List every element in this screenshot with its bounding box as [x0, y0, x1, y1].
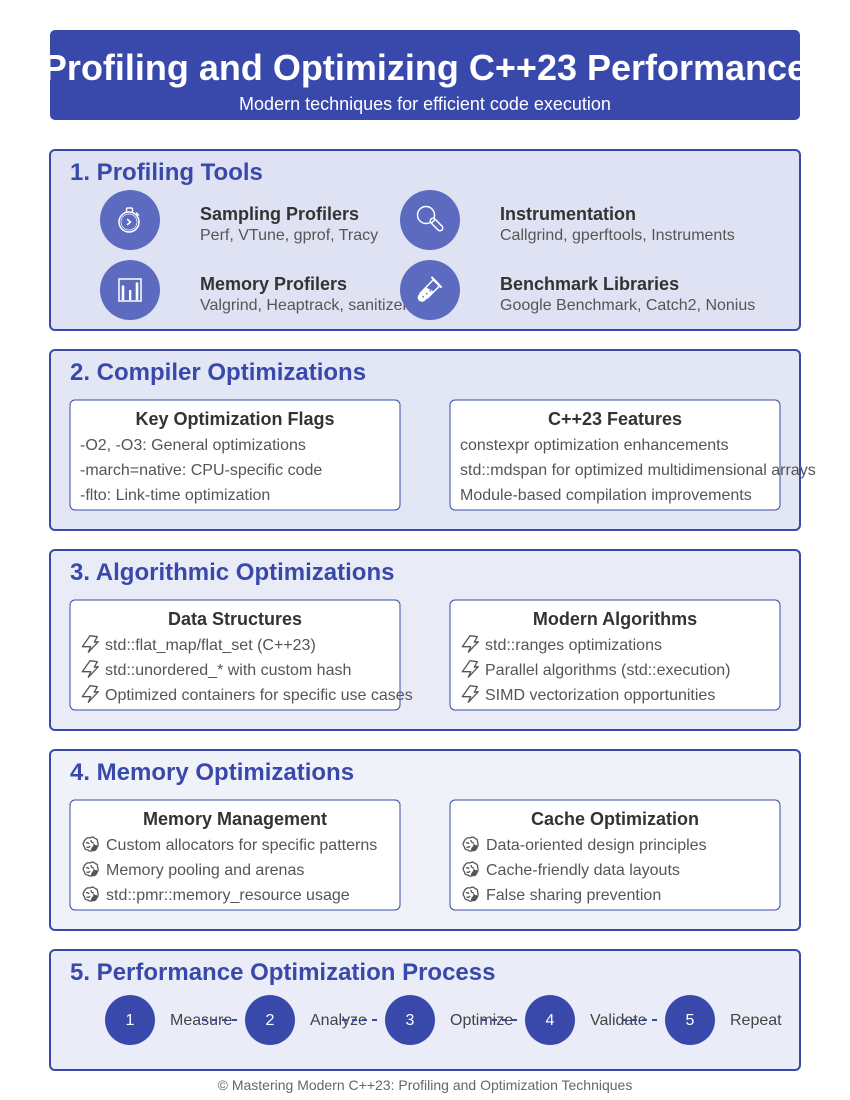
card: key optimization flags: Key Optimization Flags [135, 409, 335, 429]
step 2: 2 [266, 1012, 275, 1029]
tool: instrumentation [400, 190, 735, 250]
step 3: Optimize [450, 1012, 513, 1029]
card: modern algorithms: SIMD vectorization opportunities [485, 687, 715, 704]
icon: stopwatch [119, 208, 139, 232]
title: Profiling and Optimizing C++23 Performance [43, 47, 807, 88]
card: cache optimization: False sharing prevention [486, 887, 661, 904]
heading: process: 5. Performance Optimization Process [70, 959, 495, 986]
step 4: Validate [590, 1012, 647, 1029]
panel: algorithmic optimizations [50, 550, 800, 730]
tool: benchmark libraries [400, 260, 755, 320]
card: modern algorithms: Modern Algorithms [533, 609, 697, 629]
tool: sampling profilers [100, 190, 378, 250]
icon: magnifier [418, 206, 440, 228]
tool: memory profilers: Memory Profilers [200, 274, 347, 294]
card: modern algorithms: Parallel algorithms (std::execution) [485, 662, 730, 679]
heading: memory optimizations: 4. Memory Optimizations [70, 759, 354, 786]
card: memory management: Memory Management [143, 809, 327, 829]
card: data structures: std::unordered_* with custom hash [105, 662, 351, 679]
card: data structures: Data Structures [168, 609, 302, 629]
tool: memory profilers [100, 260, 416, 320]
card: key optimization flags [70, 400, 400, 510]
step 2: Analyze [310, 1012, 367, 1029]
tool: memory profilers: Valgrind, Heaptrack, sanitizers [200, 297, 416, 314]
panel: performance optimization process [50, 950, 800, 1070]
panel: memory optimizations [50, 750, 800, 930]
tool: sampling profilers: Perf, VTune, gprof, Tracy [200, 227, 378, 244]
tool: benchmark libraries: Google Benchmark, Catch2, Nonius [500, 297, 755, 314]
step 5: 5 [686, 1012, 695, 1029]
heading: profiling tools: 1. Profiling Tools [70, 159, 263, 186]
card: cache optimization: Data-oriented design principles [486, 837, 707, 854]
icon: test tube [418, 278, 441, 302]
card: key optimization flags: -march=native: CPU-specific code [80, 462, 322, 479]
step 5 [665, 995, 782, 1045]
heading: compiler optimizations: 2. Compiler Optimizations [70, 359, 366, 386]
tool: instrumentation: Instrumentation [500, 204, 636, 224]
card: cache optimization: Cache-friendly data layouts [486, 862, 680, 879]
step 4 [525, 995, 647, 1045]
connector arrows [202, 1019, 657, 1021]
card: data structures [70, 600, 413, 710]
card: c++23 features: Module-based compilation improvements [460, 487, 752, 504]
card: memory management: Memory pooling and arenas [106, 862, 304, 879]
subtitle: Modern techniques for efficient code execution [239, 94, 611, 114]
step 5: Repeat [730, 1012, 782, 1029]
panel: compiler optimizations [50, 350, 816, 530]
step 1: 1 [126, 1012, 135, 1029]
card: c++23 features: constexpr optimization enhancements [460, 437, 729, 454]
card: cache optimization [450, 800, 780, 910]
step 1 [105, 995, 232, 1045]
card: data structures: std::flat_map/flat_set (C++23) [105, 637, 316, 654]
card: memory management: Custom allocators for specific patterns [106, 837, 377, 854]
step 2 [245, 995, 367, 1045]
heading: algorithmic optimizations: 3. Algorithmic Optimizations [70, 559, 394, 586]
step 3 [385, 995, 513, 1045]
card: c++23 features [450, 400, 816, 510]
footer: © Mastering Modern C++23: Profiling and Optimization Techniques [218, 1077, 632, 1093]
step 1: Measure [170, 1012, 232, 1029]
card: c++23 features: C++23 Features [548, 409, 682, 429]
icon: bar chart [119, 279, 141, 301]
card: memory management [70, 800, 400, 910]
tool: instrumentation: Callgrind, gperftools, Instruments [500, 227, 735, 244]
card: modern algorithms: std::ranges optimizations [485, 637, 662, 654]
step 3: 3 [406, 1012, 415, 1029]
card: modern algorithms [450, 600, 780, 710]
tool: sampling profilers: Sampling Profilers [200, 204, 359, 224]
tool: benchmark libraries: Benchmark Libraries [500, 274, 679, 294]
header banner [43, 30, 807, 120]
card: key optimization flags: -O2, -O3: General optimizations [80, 437, 306, 454]
panel: profiling tools [50, 150, 800, 330]
card: key optimization flags: -flto: Link-time optimization [80, 487, 270, 504]
card: data structures: Optimized containers for specific use cases [105, 687, 413, 704]
step 4: 4 [546, 1012, 555, 1029]
card: memory management: std::pmr::memory_resource usage [106, 887, 350, 904]
card: cache optimization: Cache Optimization [531, 809, 699, 829]
card: c++23 features: std::mdspan for optimized multidimensional arrays [460, 462, 816, 479]
